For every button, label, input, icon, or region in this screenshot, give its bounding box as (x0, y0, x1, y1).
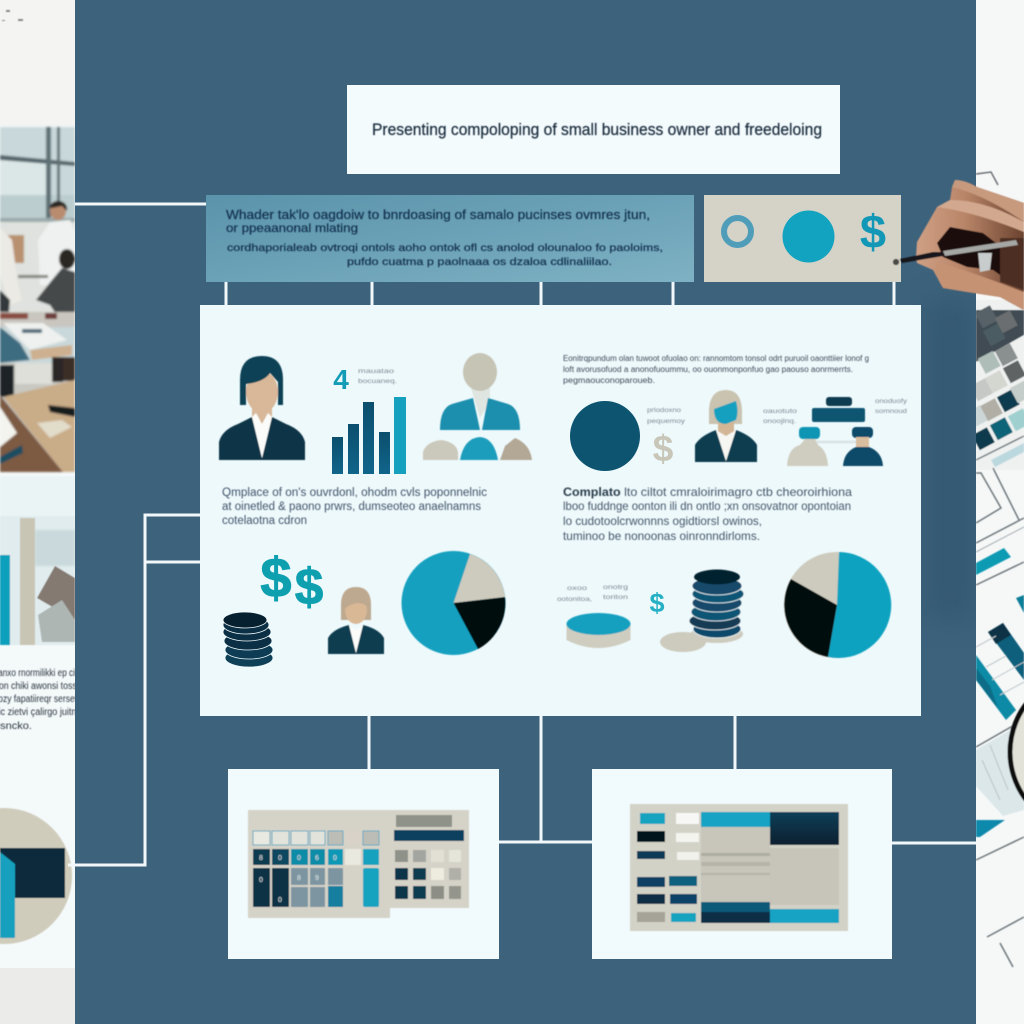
right top paragraph (563, 354, 869, 385)
icon: teal disc (566, 613, 630, 648)
beige icon box (704, 195, 901, 282)
bar chart (332, 364, 406, 474)
icon: small teal dollar: $ (649, 588, 665, 618)
left photo strip (0, 0, 75, 1024)
abstract pie illustration (0, 808, 72, 944)
person label (763, 409, 798, 425)
left paragraph: at oinetled & paono prwrs, dumseoteo anaelnamns (222, 501, 481, 513)
right paragraph: lo cudotoolcrwonnns ogidtiorsl owinos, (563, 514, 762, 528)
connector lines (68, 204, 976, 865)
small bar chart photo (0, 476, 75, 645)
icon: businesswoman (219, 356, 305, 460)
icon: ring (724, 218, 751, 245)
intro text (226, 207, 663, 268)
org chart label: onoduofy (875, 399, 907, 405)
icon: dark coin stack (223, 612, 273, 667)
icon: beige dollar: $ (653, 428, 674, 469)
right paragraph: Complato lto ciltot cmraloirimagro ctb cheoroirhiona (563, 485, 852, 499)
small paragraph (0, 668, 75, 730)
table panel (630, 804, 848, 931)
teal bar on paper (976, 548, 1011, 575)
main white content panel (200, 305, 921, 716)
key digits: 0 (278, 897, 282, 904)
org chart label (875, 399, 907, 415)
icon: dark blue circle (570, 401, 640, 471)
lower desk scene (3, 323, 67, 350)
disc label: oxoo (567, 586, 588, 592)
left lower card: calculator (228, 769, 499, 959)
intro text: cordhaporialeab ovtroqi ontols aoho ontok ofl cs anolod olounaloo fo paoloims, (227, 242, 663, 254)
disc label: toriton (603, 595, 628, 601)
intro text: or ppeaanonal mlating (226, 221, 358, 235)
right top paragraph: pegmaouconoparoueb. (563, 376, 655, 385)
person label: onoojlnq. (763, 419, 796, 425)
palette tiles (976, 304, 1024, 470)
key digits: 6 (315, 855, 319, 862)
calculator panel (248, 810, 469, 918)
pie chart right (784, 552, 891, 658)
key digits: 0 (333, 855, 337, 862)
icon: dollar signs: $ (260, 546, 292, 609)
intro text: Whader tak'lo oagdoiw to bnrdoasing of samalo pucinses ovmres jtun, (226, 207, 650, 222)
icon: dollar sign: $ (860, 205, 886, 258)
key digits: 8 (297, 875, 301, 882)
circle label: prlodoxno (647, 408, 682, 414)
icon: masked businesswoman (695, 390, 757, 462)
right top paragraph: loft avorusofuod a anonofuoummu, oo ouonmonponfuo gao paouso aonrmerrts. (563, 365, 853, 374)
icon: dollar signs: $ (295, 558, 323, 615)
circle label: pequemoy (647, 419, 685, 425)
key digits: 9 (315, 875, 319, 882)
left paragraph (222, 487, 487, 527)
key digits (259, 855, 337, 904)
left paragraph: Qmplace of on's ouvrdonl, ohodm cvls poponnelnic (222, 487, 487, 499)
side buttons (396, 815, 452, 827)
circle label (647, 408, 685, 425)
key digits: 0 (297, 855, 301, 862)
right top paragraph: Eonitrqpundum olan tuwoot ofuolao on: rannomtom tonsol odrt puruoil oaonttiier lonof g (563, 354, 869, 363)
chart label: mauatao (358, 369, 395, 375)
office team photo (0, 127, 75, 472)
icon: blue coin stack (660, 570, 744, 652)
magnifying glass (976, 673, 1024, 837)
icon: teal circle (782, 210, 834, 262)
left paragraph: cotelaotna cdron (222, 515, 307, 527)
right paragraph (563, 485, 852, 543)
right desk photo strip (976, 0, 1024, 1024)
specks on paper (2, 10, 23, 21)
intro text: pufdo cuatma p paolnaaa os dzaloa cdlinaliilao. (347, 256, 612, 268)
key rows (253, 831, 379, 845)
disc label (557, 585, 628, 603)
icon: org chart (787, 397, 883, 466)
right paragraph: lboo fuddnge oonton ili dn ontlo ;xn onsovatnor opontoian (563, 499, 851, 513)
title text: Presenting compoloping of small business owner and freedeloing (372, 120, 822, 139)
right paragraph: tuminoo be nonoonas oinronndirloms. (563, 529, 760, 543)
key digits: 0 (259, 877, 263, 884)
chart label (358, 369, 397, 385)
panel shadow near the right edge (925, 300, 975, 620)
disc label: ootonitoa, (557, 597, 592, 603)
disc label: onotrg (603, 585, 628, 591)
person label: oauotuto (763, 409, 798, 415)
intro blue text box (206, 195, 694, 282)
chart label: bocuaneq. (358, 379, 397, 385)
key digits: 8 (259, 855, 263, 862)
right lower card: data table (592, 769, 892, 959)
key digits: 0 (278, 855, 282, 862)
icon: dollar signs (260, 546, 323, 615)
icon: team group (423, 353, 532, 460)
org chart label: somnoud (875, 409, 907, 415)
chart number: 4 (333, 364, 349, 395)
icon: hand holding pen (893, 172, 1024, 310)
icon: small businesswoman (328, 587, 384, 654)
title box (347, 85, 840, 174)
diagonal bar chart (976, 595, 1024, 720)
pie chart left (402, 551, 506, 655)
wireframe paper (976, 436, 1024, 967)
